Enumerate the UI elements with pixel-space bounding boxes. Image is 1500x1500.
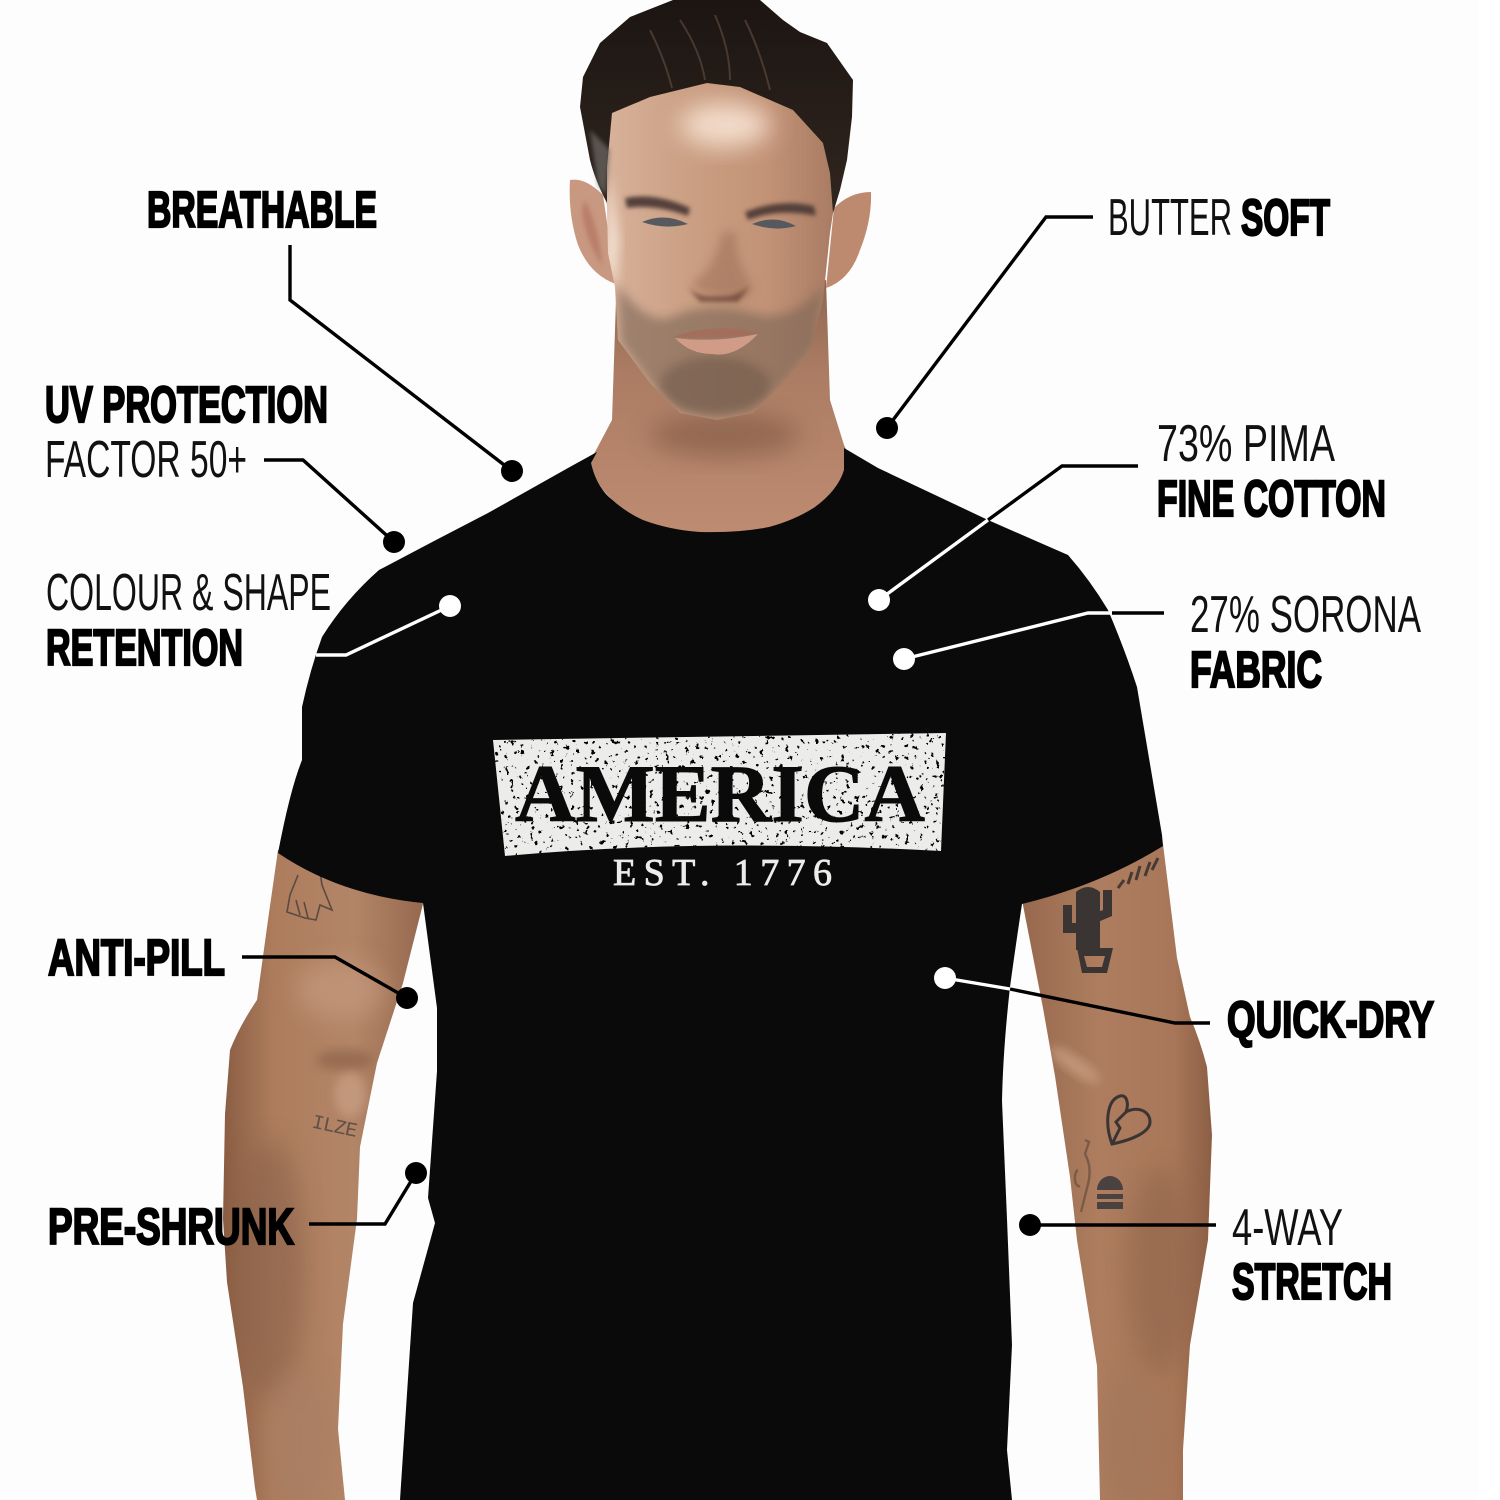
callout: anti-pill (48, 929, 418, 1009)
callout: butter soft: BUTTER (1108, 189, 1232, 247)
callout: colour and shape retention (46, 564, 461, 676)
neck (584, 280, 860, 540)
callout: 4-way stretch: 4-WAY (1232, 1199, 1343, 1257)
callout: sorona fabric: FABRIC (1190, 641, 1322, 698)
callout: pima cotton: FINE COTTON (1157, 470, 1386, 527)
callout: breathable (147, 181, 523, 482)
stubble (618, 285, 823, 420)
callout: sorona fabric (893, 586, 1421, 698)
tattoo: hand (287, 872, 332, 920)
right eye (752, 219, 796, 229)
head skin (602, 60, 840, 420)
shirt print: America panel: AMERICA (515, 748, 925, 839)
callout: pima cotton (868, 415, 1386, 611)
model photo (223, 0, 1212, 1500)
tattoo text: ILZE (310, 1112, 359, 1144)
callout: colour and shape retention: COLOUR & SHAPE (46, 564, 331, 622)
hair (580, 0, 853, 213)
callout: uv protection: UV PROTECTION (45, 376, 328, 433)
callout: pre-shrunk (48, 1162, 427, 1255)
nose shadow (690, 232, 752, 299)
callout: 4-way stretch (1019, 1199, 1392, 1310)
callout: butter soft: SOFT (1241, 189, 1330, 246)
callout: pre-shrunk: PRE-SHRUNK (48, 1198, 294, 1255)
callout: breathable: BREATHABLE (147, 181, 377, 238)
t-shirt (278, 448, 1163, 1500)
shirt print: America panel: EST. 1776 (613, 852, 832, 894)
right brow (745, 203, 816, 220)
ears (570, 180, 871, 288)
callout: anti-pill: ANTI-PILL (48, 929, 225, 986)
callout: butter soft (876, 189, 1330, 439)
left eye (642, 217, 688, 227)
tattoo: bottle (1075, 1140, 1090, 1212)
left arm (223, 850, 424, 1500)
callout: colour and shape retention: RETENTION (46, 619, 243, 676)
chin shade (660, 357, 770, 413)
left brow (625, 196, 690, 216)
tattoo: burger (1097, 1176, 1123, 1209)
callout: quick-dry (934, 967, 1434, 1048)
right arm (1022, 844, 1212, 1500)
callout: uv protection: FACTOR 50+ (45, 431, 247, 489)
tattoo: cactus (1063, 887, 1113, 973)
side highlight (604, 175, 620, 290)
tattoo: broken heart (1108, 1096, 1150, 1144)
forehead highlight (680, 103, 770, 147)
tattoo: sleeve rays (1118, 858, 1158, 888)
hair strands (650, 15, 770, 90)
callout: 4-way stretch: STRETCH (1232, 1253, 1392, 1310)
chin shadow on neck (650, 413, 800, 457)
shirt print: America panel (493, 733, 946, 886)
callout: uv protection (45, 376, 405, 553)
facial shading (604, 103, 823, 420)
mouth (673, 328, 760, 355)
callout: pima cotton: 73% PIMA (1157, 415, 1335, 473)
